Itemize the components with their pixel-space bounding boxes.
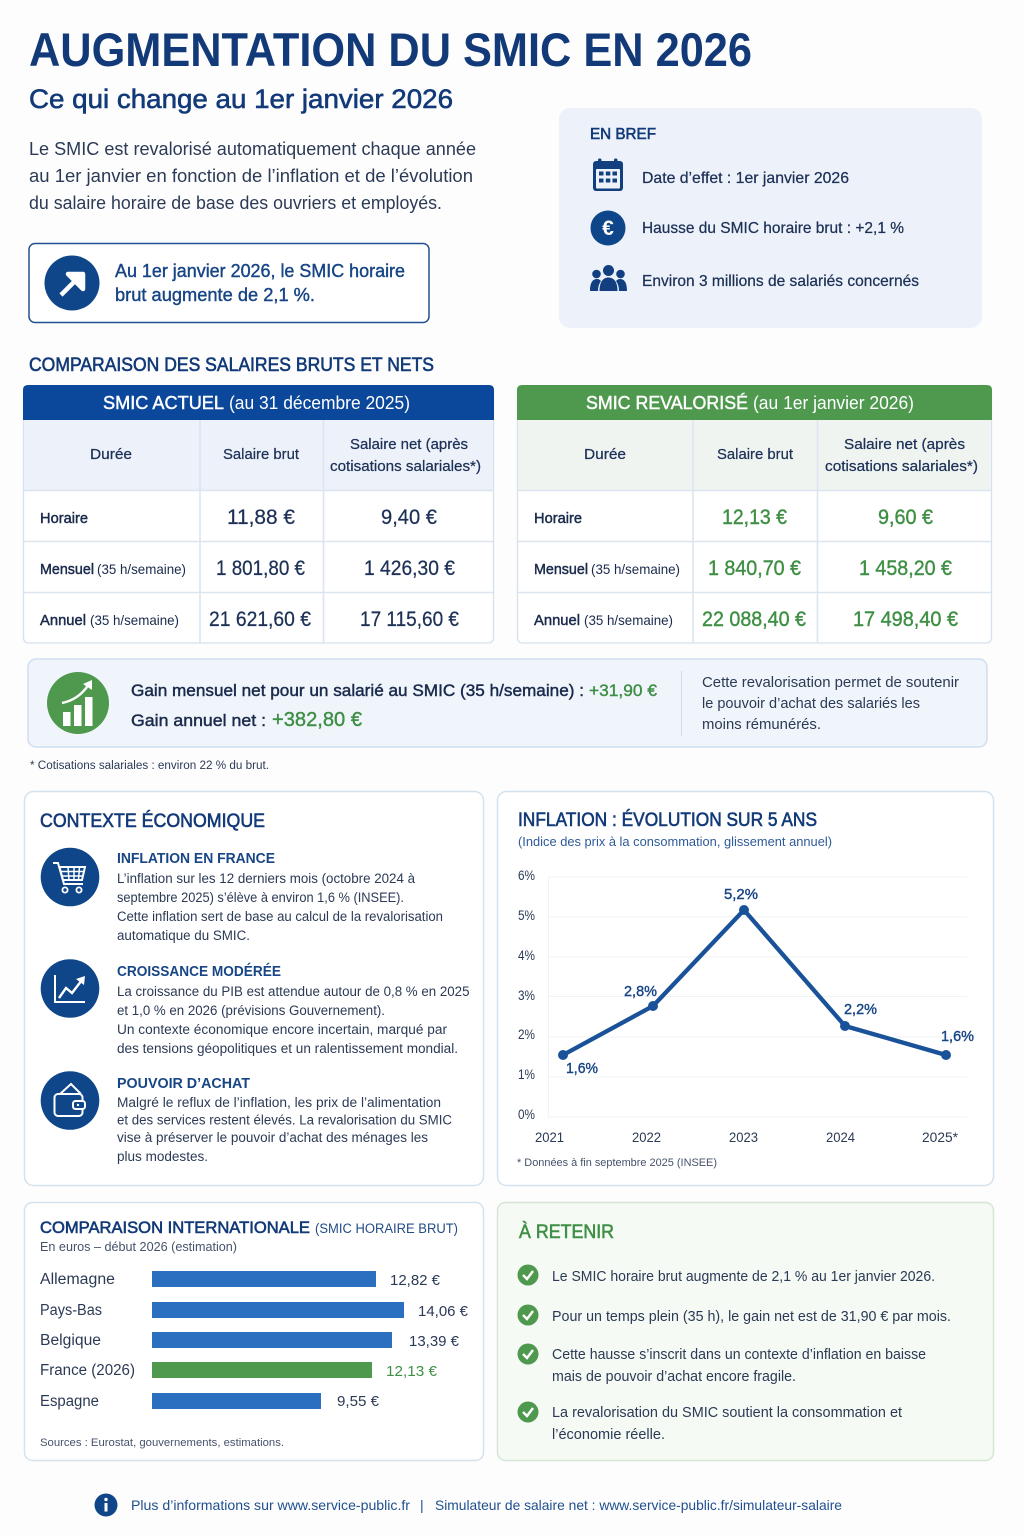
column headers: cotisations salariales*) — [330, 458, 481, 475]
column headers — [584, 436, 978, 475]
row: mensuel: 1 458,20 € — [859, 557, 952, 580]
text: date d'effet: Date d’effet : 1er janvier 2026 — [642, 170, 849, 187]
intro text: du salaire horaire de base des ouvriers et employés. — [29, 193, 442, 213]
heading: comparaison internationale: COMPARAISON INTERNATIONALE — [40, 1219, 310, 1237]
x axis labels — [535, 1130, 959, 1145]
item: contexte: mais de pouvoir d’achat encore fragile. — [552, 1368, 796, 1385]
text: soutien du pouvoir d'achat: le pouvoir d’achat des salariés les — [702, 695, 920, 712]
row: annuel: 22 088,40 € — [702, 608, 806, 631]
heading: comparaison des salaires: COMPARAISON DES SALAIRES BRUTS ET NETS — [29, 355, 434, 376]
callout text — [115, 261, 405, 305]
heading: inflation: INFLATION : ÉVOLUTION SUR 5 ANS — [518, 810, 817, 831]
panel: en bref — [559, 108, 982, 328]
sources: Sources : Eurostat, gouvernements, estimations. — [40, 1437, 284, 1449]
data labels — [566, 886, 974, 1077]
footer links: | — [420, 1497, 424, 1513]
callout text: Au 1er janvier 2026, le SMIC horaire — [115, 261, 405, 281]
intro text: au 1er janvier en fonction de l’inflation et de l’évolution — [29, 166, 473, 186]
row: annuel: 21 621,60 € — [209, 608, 311, 631]
table: smic revalorisé — [517, 385, 992, 643]
bar: France — [40, 1362, 438, 1380]
text block: inflation en france: Cette inflation sert de base au calcul de la revalorisation — [117, 909, 443, 924]
row: mensuel: 1 426,30 € — [364, 557, 455, 580]
row: annuel: 17 498,40 € — [853, 608, 958, 631]
column headers: Durée — [584, 446, 626, 463]
y axis labels: 4% — [518, 948, 535, 963]
text block: croissance modérée: CROISSANCE MODÉRÉE — [117, 963, 281, 980]
icon: euro — [590, 210, 626, 246]
y axis labels: 6% — [518, 868, 535, 883]
item: consommation: l’économie réelle. — [552, 1426, 665, 1443]
footnote: cotisations: * Cotisations salariales : environ 22 % du brut. — [30, 760, 269, 772]
item: contexte: Cette hausse s’inscrit dans un contexte d’inflation en baisse — [552, 1346, 926, 1363]
table header: smic actuel: (au 31 décembre 2025) — [229, 393, 410, 413]
text: gain mensuel: Gain mensuel net pour un salarié au SMIC (35 h/semaine) : — [131, 681, 584, 700]
table header: smic revalorisé: SMIC REVALORISÉ — [586, 393, 748, 413]
footer — [94, 1494, 842, 1516]
heading: contexte économique: CONTEXTE ÉCONOMIQUE — [40, 811, 265, 832]
row: mensuel: 1 840,70 € — [708, 557, 801, 580]
text: soutien du pouvoir d'achat: moins rémunérés. — [702, 716, 821, 733]
panel: comparaison internationale — [24, 1202, 484, 1460]
text block: inflation en france: septembre 2025) s’élève à environ 1,6 % (INSEE). — [117, 890, 404, 905]
footer links: Plus d’informations sur www.service-public.fr — [131, 1497, 410, 1513]
bar: Belgique — [40, 1332, 460, 1350]
text block: inflation en france: INFLATION EN FRANCE — [117, 851, 275, 867]
title: AUGMENTATION DU SMIC EN 2026 — [29, 23, 752, 76]
line chart — [518, 868, 974, 1145]
table header: smic actuel: SMIC ACTUEL — [103, 393, 224, 413]
bar: Belgique: 13,39 € — [409, 1333, 460, 1350]
row: annuel — [40, 608, 459, 631]
heading: à retenir: À RETENIR — [519, 1220, 614, 1243]
row: horaire: 11,88 € — [227, 506, 295, 529]
row: horaire: 9,60 € — [878, 506, 933, 529]
data labels: 1,6% — [941, 1028, 974, 1045]
icon: growth line chart — [41, 959, 99, 1018]
row: annuel: (35 h/semaine) — [90, 612, 179, 628]
text block: pouvoir d'achat: Malgré le reflux de l’inflation, les prix de l’alimentation — [117, 1095, 441, 1110]
x axis labels: 2021 — [535, 1130, 564, 1145]
row: annuel: 17 115,60 € — [360, 608, 459, 631]
row: annuel: Annuel — [534, 613, 580, 629]
column headers: Salaire brut — [717, 446, 794, 463]
callout: hausse de 2,1 % — [29, 244, 429, 322]
row: mensuel: (35 h/semaine) — [591, 561, 680, 577]
panel: contexte économique — [24, 792, 484, 1186]
x axis labels: 2023 — [729, 1130, 758, 1145]
column headers — [90, 436, 481, 475]
text: gain annuel: Gain annuel net : — [131, 711, 266, 730]
row: mensuel — [534, 557, 952, 580]
icon: wallet — [41, 1071, 99, 1130]
y axis labels: 0% — [518, 1107, 535, 1122]
row: mensuel: Mensuel — [534, 562, 588, 578]
text: soutien du pouvoir d'achat: Cette revalorisation permet de soutenir — [702, 674, 959, 691]
text block: croissance modérée: Un contexte économique encore incertain, marqué par — [117, 1022, 448, 1037]
icon: euro: € — [602, 217, 614, 240]
icon: growth chart — [47, 672, 109, 734]
bar chart — [40, 1271, 469, 1410]
row: horaire — [40, 506, 437, 529]
bar: Allemagne — [40, 1271, 441, 1289]
bar: Espagne: 9,55 € — [337, 1393, 380, 1410]
data labels: 1,6% — [566, 1060, 598, 1077]
item: consommation — [518, 1402, 903, 1443]
subheading: en euros: En euros – début 2026 (estimation) — [40, 1240, 237, 1254]
bar: Allemagne: 12,82 € — [390, 1272, 441, 1289]
table header: smic actuel — [23, 385, 494, 420]
text: salariés concernés: Environ 3 millions de salariés concernés — [642, 273, 919, 290]
x axis labels: 2025* — [922, 1130, 959, 1145]
bar: Espagne — [40, 1393, 380, 1410]
panel: à retenir — [498, 1202, 994, 1460]
row: mensuel: (35 h/semaine) — [97, 561, 186, 577]
bar: Espagne: Espagne — [40, 1393, 99, 1410]
bar: Belgique: Belgique — [40, 1332, 101, 1349]
data labels: 5,2% — [724, 886, 758, 903]
footer links: Simulateur de salaire net : www.service-public.fr/simulateur-salaire — [435, 1497, 842, 1513]
text block: pouvoir d'achat: vise à préserver le pouvoir d’achat des ménages les — [117, 1130, 428, 1145]
row: mensuel — [40, 557, 455, 580]
heading: comparaison internationale: (SMIC HORAIRE BRUT) — [315, 1221, 458, 1236]
text: soutien du pouvoir d'achat — [702, 674, 959, 733]
column headers: Salaire net (après — [844, 436, 965, 453]
y axis labels: 3% — [518, 988, 535, 1003]
column headers: Salaire brut — [223, 446, 300, 463]
x axis labels: 2022 — [632, 1130, 661, 1145]
bar: Pays-Bas: Pays-Bas — [40, 1302, 102, 1319]
bar: Pays-Bas — [40, 1302, 469, 1320]
text block: inflation en france: L’inflation sur les 12 derniers mois (octobre 2024 à — [117, 871, 415, 886]
text block: croissance modérée: des tensions géopolitiques et un ralentissement mondial. — [117, 1041, 458, 1056]
icon: people — [590, 265, 627, 291]
data line — [558, 905, 951, 1060]
y axis labels — [518, 868, 535, 1122]
text block: inflation en france — [117, 851, 443, 943]
chart subtitle: (Indice des prix à la consommation, glissement annuel) — [518, 834, 832, 849]
table header: smic revalorisé: (au 1er janvier 2026) — [753, 393, 914, 413]
text block: inflation en france: automatique du SMIC. — [117, 928, 250, 943]
icon: shopping cart — [41, 848, 99, 906]
y axis labels: 1% — [518, 1067, 535, 1082]
item: hausse: Le SMIC horaire brut augmente de 2,1 % au 1er janvier 2026. — [552, 1268, 935, 1285]
icon: info — [94, 1494, 118, 1516]
subtitle: Ce qui change au 1er janvier 2026 — [29, 84, 453, 114]
heading: en bref: EN BREF — [590, 126, 656, 143]
y axis labels: 5% — [518, 908, 535, 923]
row: horaire — [534, 506, 933, 529]
y axis labels: 2% — [518, 1027, 535, 1042]
intro text: Le SMIC est revalorisé automatiquement chaque année — [29, 139, 476, 159]
column headers: Durée — [90, 446, 132, 463]
row: mensuel: 1 801,80 € — [216, 557, 305, 580]
column headers: Salaire net (après — [350, 436, 468, 453]
panel: gain net — [28, 659, 987, 747]
row: mensuel: Mensuel — [40, 562, 94, 578]
item: consommation: La revalorisation du SMIC soutient la consommation et — [552, 1404, 903, 1421]
item: gain net: Pour un temps plein (35 h), le gain net est de 31,90 € par mois. — [552, 1308, 951, 1325]
text block: pouvoir d'achat — [117, 1076, 452, 1164]
heading: comparaison internationale — [40, 1219, 458, 1237]
icon: calendar — [593, 158, 623, 191]
data labels: 2,8% — [624, 983, 657, 1000]
row: annuel: Annuel — [40, 613, 86, 629]
icon: rising arrow — [44, 256, 100, 310]
intro text — [29, 139, 476, 213]
column headers: cotisations salariales*) — [825, 458, 978, 475]
footer links — [131, 1497, 842, 1513]
text block: croissance modérée: La croissance du PIB est attendue autour de 0,8 % en 2025 — [117, 984, 470, 999]
text: hausse: Hausse du SMIC horaire brut : +2,1 % — [642, 220, 904, 237]
data labels: 2,2% — [844, 1001, 877, 1018]
text: gain annuel: +382,80 € — [272, 709, 362, 731]
row: horaire: Horaire — [40, 511, 88, 527]
text block: pouvoir d'achat: plus modestes. — [117, 1149, 208, 1164]
bar: Allemagne: Allemagne — [40, 1271, 115, 1288]
text block: pouvoir d'achat: POUVOIR D’ACHAT — [117, 1076, 250, 1092]
text: gain annuel — [131, 709, 362, 731]
row: horaire: Horaire — [534, 511, 582, 527]
table header: smic revalorisé — [517, 385, 992, 420]
text block: pouvoir d'achat: et des services restent élevés. La revalorisation du SMIC — [117, 1112, 452, 1128]
x axis labels: 2024 — [826, 1130, 855, 1145]
text block: croissance modérée: et 1,0 % en 2026 (prévisions Gouvernement). — [117, 1003, 385, 1018]
callout text: brut augmente de 2,1 %. — [115, 285, 315, 305]
panel: inflation chart — [498, 792, 994, 1186]
bar: France: 12,13 € — [386, 1363, 438, 1380]
text: gain mensuel: +31,90 € — [589, 681, 658, 700]
bar: France: France (2026) — [40, 1362, 135, 1379]
item: contexte — [518, 1344, 926, 1385]
table: smic actuel — [23, 385, 494, 643]
row: horaire: 12,13 € — [722, 506, 787, 529]
row: annuel: (35 h/semaine) — [584, 612, 673, 628]
text block: croissance modérée — [117, 963, 470, 1056]
row: horaire: 9,40 € — [381, 506, 437, 529]
bar: Pays-Bas: 14,06 € — [418, 1303, 469, 1320]
chart footnote: * Données à fin septembre 2025 (INSEE) — [517, 1157, 717, 1169]
row: annuel — [534, 608, 958, 631]
